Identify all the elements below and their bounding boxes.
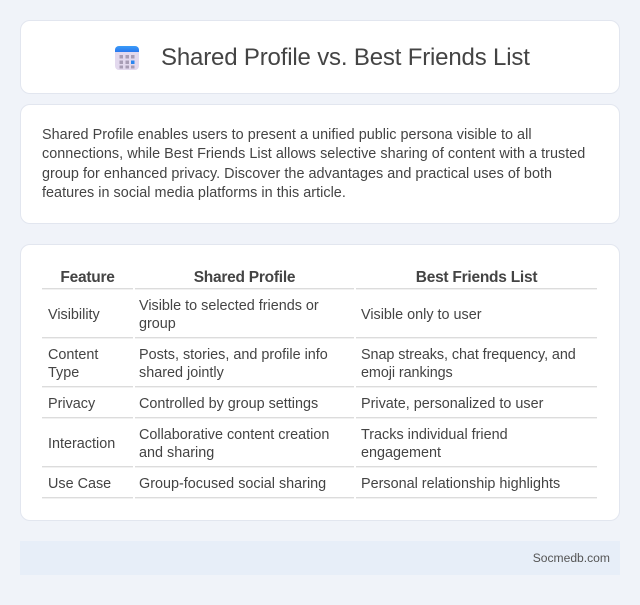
row: privacy: Privacy <box>48 396 95 412</box>
panel: title card <box>20 20 620 94</box>
row: visibility: Visibility <box>48 307 100 323</box>
row: interaction: Interaction <box>48 436 115 452</box>
row: content type: Content <box>48 347 98 363</box>
row: visibility: group <box>139 316 176 332</box>
row: interaction <box>48 427 508 461</box>
panel: introduction <box>20 104 620 224</box>
row: use case: Group-focused social sharing <box>139 476 326 492</box>
table header <box>60 269 538 286</box>
footer bar <box>20 541 620 575</box>
row: content type: Snap streaks, chat frequency, and <box>361 347 576 363</box>
table header: Feature <box>60 269 115 286</box>
title: Shared Profile vs. Best Friends List <box>161 44 530 71</box>
row: content type: Posts, stories, and profile info <box>139 347 328 363</box>
row: interaction: Tracks individual friend <box>361 427 508 443</box>
table header: Shared Profile <box>194 269 295 286</box>
row: content type: Type <box>48 365 79 381</box>
text block: introduction: connections, while Best Friends List allows selective sharing of content with a trusted <box>42 146 585 162</box>
panel: comparison table <box>20 244 620 521</box>
row: privacy: Private, personalized to user <box>361 396 543 412</box>
text block: introduction <box>42 127 585 201</box>
text block: introduction: Shared Profile enables users to present a unified public persona visible to all <box>42 127 532 143</box>
text block: introduction: features in social media platforms in this article. <box>42 185 346 201</box>
row: content type: shared jointly <box>139 365 224 381</box>
row: visibility <box>48 298 482 332</box>
row: interaction: and sharing <box>139 445 214 461</box>
row: use case: Use Case <box>48 476 111 492</box>
row: interaction: engagement <box>361 445 441 461</box>
row: use case: Personal relationship highlights <box>361 476 560 492</box>
row: visibility: Visible to selected friends or <box>139 298 319 314</box>
icon: calendar <box>115 46 139 70</box>
footer text: Socmedb.com <box>533 551 610 565</box>
row: use case <box>48 476 560 492</box>
row: content type: emoji rankings <box>361 365 453 381</box>
row: privacy: Controlled by group settings <box>139 396 318 412</box>
table header: Best Friends List <box>416 269 537 286</box>
text block: introduction: group for enhanced privacy. Discover the advantages and practical uses of both <box>42 166 552 182</box>
row: interaction: Collaborative content creation <box>139 427 329 443</box>
row: visibility: Visible only to user <box>361 307 482 323</box>
row: content type <box>48 347 576 381</box>
row: privacy <box>48 396 544 412</box>
